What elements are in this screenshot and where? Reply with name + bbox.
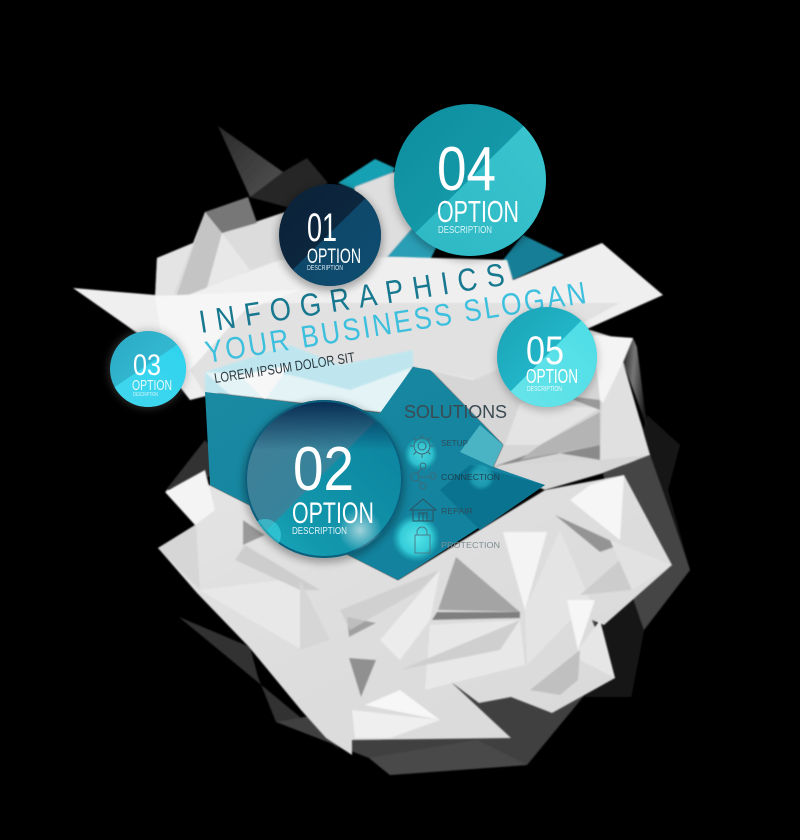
circle 01: DESCRIPTION xyxy=(307,265,343,272)
dark shadow shards behind the paper mass xyxy=(166,126,690,775)
slogan banner xyxy=(73,243,663,413)
circle 03 xyxy=(100,329,195,410)
circle 03: OPTION xyxy=(132,377,172,394)
crumpled paper mass: upper xyxy=(155,159,650,490)
label: repair: REPAIR xyxy=(441,507,473,516)
circle 02: 02 xyxy=(293,435,354,504)
label: setup: SETUP xyxy=(441,439,468,448)
icon: repair house xyxy=(410,499,436,521)
circle 03: 03 xyxy=(133,349,161,382)
circle 04 xyxy=(389,104,546,265)
circle 01 xyxy=(273,182,387,296)
circle 05 xyxy=(496,307,600,411)
icon: protection lock xyxy=(415,527,430,553)
subtitle: your business slogan: YOUR BUSINESS SLOGAN xyxy=(203,276,588,370)
circle 02: OPTION xyxy=(292,497,374,530)
circle 05: OPTION xyxy=(526,366,578,388)
label: protection: PROTECTION xyxy=(441,541,500,550)
circle 04: DESCRIPTION xyxy=(438,225,492,236)
solutions list glows xyxy=(392,437,495,562)
circle 04: OPTION xyxy=(437,194,519,229)
circle 02 xyxy=(240,397,410,570)
circle 01: 01 xyxy=(307,206,337,250)
circle 03: DESCRIPTION xyxy=(133,392,158,398)
panel: teal solutions panel xyxy=(205,367,545,580)
infographic canvas xyxy=(72,104,690,776)
crumpled paper mass: lower xyxy=(158,470,672,755)
icon: connection nodes xyxy=(411,463,436,489)
label: connection: CONNECTION xyxy=(441,473,500,482)
icon: setup gear xyxy=(410,434,434,458)
circle 05: DESCRIPTION xyxy=(527,386,562,393)
title: infographics: INFOGRAPHICS xyxy=(197,257,507,340)
heading: solutions: SOLUTIONS xyxy=(404,402,507,422)
title block xyxy=(197,257,588,386)
tagline: LOREM IPSUM DOLOR SIT xyxy=(213,349,356,386)
circle 01: OPTION xyxy=(307,245,361,268)
circle 02: DESCRIPTION xyxy=(292,526,347,537)
circle 05: 05 xyxy=(526,329,564,373)
circle 04: 04 xyxy=(437,135,496,204)
